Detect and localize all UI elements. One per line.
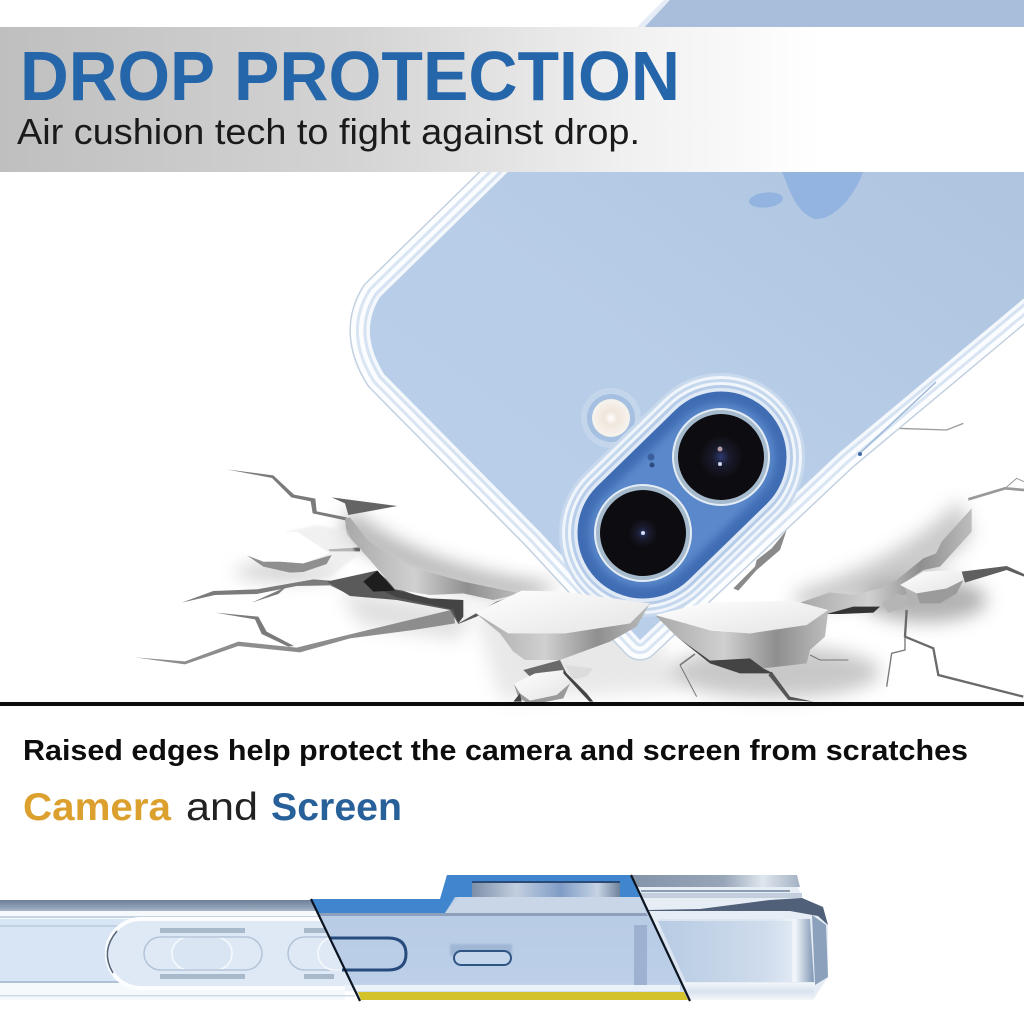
right section <box>631 875 828 1000</box>
band under ring <box>319 913 648 916</box>
right crack face <box>800 508 972 614</box>
text: camera and screen: Camera <box>23 786 171 829</box>
phone case top sliver <box>634 0 1024 30</box>
title <box>20 37 680 115</box>
crack lines <box>135 469 455 664</box>
back panel <box>370 160 1024 640</box>
subtitle: Air cushion tech to fight against drop. <box>17 111 640 152</box>
text: camera and screen <box>23 786 402 829</box>
chunk faces <box>523 660 567 677</box>
tiny chunk <box>882 593 908 613</box>
text: camera and screen: and <box>186 786 258 829</box>
case rim <box>370 160 1024 640</box>
blue band <box>311 875 640 913</box>
floor separator line <box>0 702 1024 706</box>
text: camera and screen: Screen <box>271 786 402 829</box>
phone <box>370 160 1024 640</box>
left section <box>0 900 377 1000</box>
phone shadow shards <box>733 530 787 591</box>
thin cracks <box>680 423 1024 697</box>
cracks, left side <box>135 469 520 664</box>
apple logo <box>748 172 863 219</box>
small chunk <box>917 580 963 603</box>
small pill <box>450 944 512 965</box>
mic dots <box>648 454 654 468</box>
middle section <box>311 875 689 1000</box>
camera island <box>643 457 721 533</box>
chunk <box>655 610 828 668</box>
front chunk right <box>655 570 963 673</box>
yellow stripe <box>358 992 688 1000</box>
inner darker vertical <box>634 925 647 985</box>
lower highlight <box>345 985 680 991</box>
button outline <box>107 919 377 988</box>
raised camera ring <box>445 897 646 913</box>
flash <box>581 388 641 448</box>
crack cavity <box>327 571 520 624</box>
lens edge <box>472 882 620 897</box>
title: PROTECTION <box>234 37 680 115</box>
title: DROP <box>20 37 215 115</box>
left chunk <box>243 525 357 577</box>
section cut lines <box>311 875 690 1001</box>
header band <box>0 27 1024 172</box>
crack face <box>345 517 520 600</box>
front chunk center <box>475 591 650 705</box>
cracks, right side <box>680 423 1024 702</box>
dark pill <box>330 938 406 970</box>
text: raised edges: Raised edges help protect the camera and screen from scratches <box>23 735 968 767</box>
pill bars <box>160 928 334 979</box>
phone edge detail <box>0 875 828 1001</box>
floor shadows <box>235 500 987 700</box>
camera lens bottom <box>594 484 692 582</box>
pill outlines <box>144 937 368 970</box>
camera lens top <box>672 408 770 506</box>
dark wedge <box>332 497 397 515</box>
tiny chunks <box>565 665 593 679</box>
side button <box>858 382 936 455</box>
chunk top <box>475 591 650 633</box>
